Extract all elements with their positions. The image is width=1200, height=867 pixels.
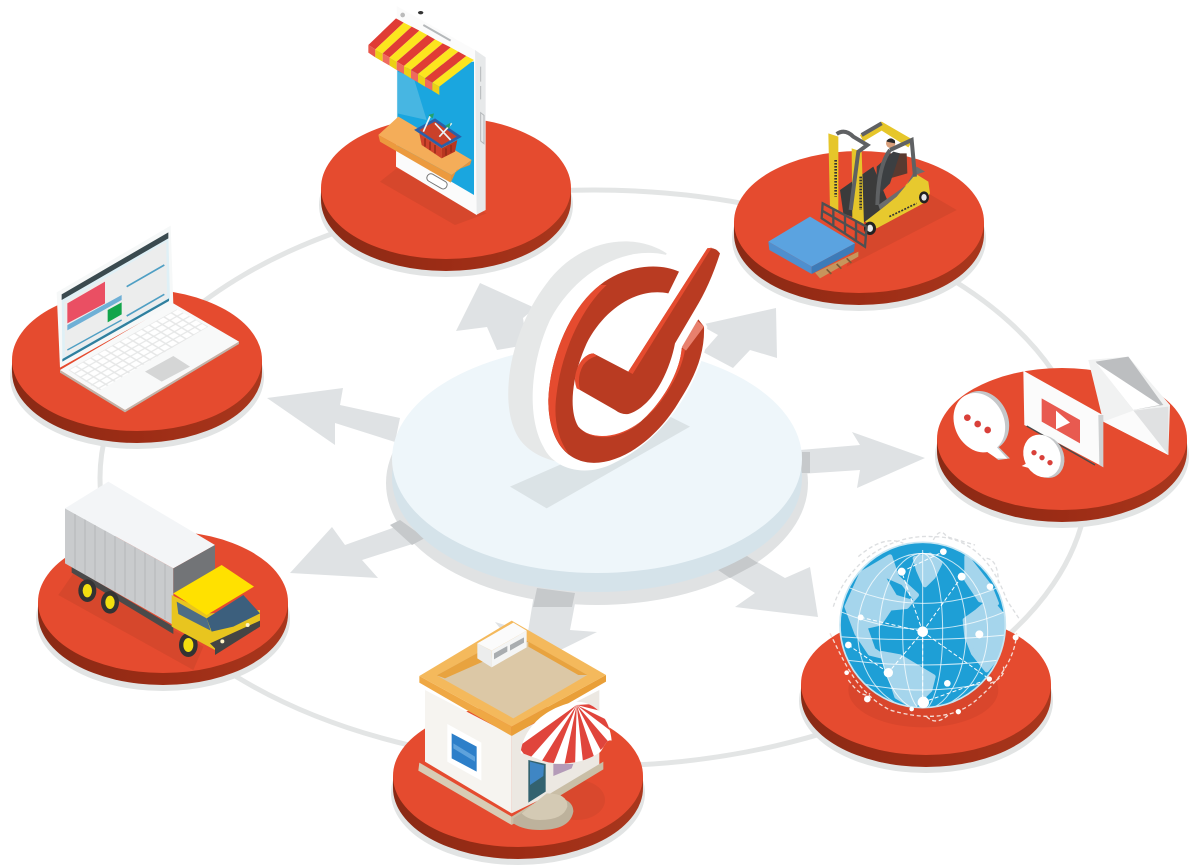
red ring bbox=[548, 266, 704, 463]
pallet bbox=[768, 217, 858, 278]
arrow: down right bbox=[718, 556, 818, 617]
cab bbox=[172, 565, 260, 655]
arrow: up right bbox=[700, 308, 777, 368]
video panel bbox=[1023, 371, 1103, 467]
door bbox=[528, 760, 573, 803]
entrance step bbox=[513, 793, 573, 830]
phone body bbox=[396, 6, 486, 215]
forklift shadow bbox=[847, 187, 957, 267]
arrow: right bbox=[800, 432, 925, 488]
roof bbox=[419, 621, 606, 736]
wheels bbox=[78, 579, 198, 657]
arrows radiating from the centre bbox=[267, 283, 925, 665]
forklift mast bbox=[828, 122, 915, 225]
envelope bbox=[1088, 357, 1170, 455]
arrow overlaps on platform shadow bbox=[390, 452, 810, 607]
station: storefront bbox=[391, 621, 645, 865]
shelf bbox=[378, 117, 472, 183]
dome awning bbox=[520, 702, 612, 764]
emblem grey back bbox=[508, 241, 667, 462]
phone shadow bbox=[380, 168, 487, 225]
tick bbox=[576, 248, 720, 414]
station: forklift warehouse bbox=[732, 122, 986, 311]
emblem ground shadow bbox=[510, 417, 690, 508]
back orbits bbox=[833, 532, 1020, 620]
station: delivery truck bbox=[36, 482, 290, 691]
network nodes bbox=[844, 548, 1019, 714]
forklift body bbox=[840, 138, 930, 235]
globe bbox=[840, 542, 1007, 710]
truck shadow bbox=[58, 573, 203, 670]
laptop base bbox=[60, 303, 239, 412]
central platform bbox=[386, 345, 810, 607]
platform bbox=[799, 613, 1053, 773]
emblem white face bbox=[533, 253, 707, 470]
front orbits bbox=[830, 630, 1017, 721]
ring cut face bbox=[682, 321, 704, 351]
store shadow bbox=[548, 780, 605, 820]
small speech bubble bbox=[1016, 428, 1071, 484]
station: messaging and media bbox=[935, 357, 1189, 528]
platform bbox=[391, 705, 645, 865]
platform bbox=[732, 151, 986, 311]
ring light edges bbox=[548, 285, 607, 453]
rooftop unit bbox=[477, 623, 527, 667]
platform bbox=[935, 368, 1189, 528]
cargo box bbox=[65, 482, 215, 634]
store walls bbox=[418, 690, 603, 825]
grid lines bbox=[840, 550, 1006, 710]
network links bbox=[848, 552, 989, 702]
awning bbox=[368, 18, 474, 95]
station: global network bbox=[799, 532, 1053, 773]
basket bbox=[417, 113, 459, 158]
platform bbox=[10, 289, 264, 449]
network ring bbox=[100, 190, 1088, 766]
window bbox=[447, 724, 481, 781]
arrow: down bbox=[495, 588, 597, 665]
station: mobile shop bbox=[319, 6, 573, 277]
platform bbox=[36, 531, 290, 691]
fork frame bbox=[822, 203, 867, 247]
laptop lid bbox=[57, 226, 173, 368]
arrow: up left bbox=[456, 283, 535, 350]
globe shadow bbox=[848, 653, 998, 727]
continents bbox=[847, 555, 1007, 707]
arrow: left bbox=[267, 388, 400, 445]
tick light edges bbox=[575, 353, 597, 390]
arrow: down left bbox=[290, 520, 425, 578]
large speech bubble bbox=[944, 382, 1019, 461]
platform bbox=[319, 117, 573, 277]
station: laptop bbox=[10, 226, 264, 449]
white gap beside tick bbox=[637, 345, 682, 420]
check mark emblem bbox=[508, 241, 720, 508]
